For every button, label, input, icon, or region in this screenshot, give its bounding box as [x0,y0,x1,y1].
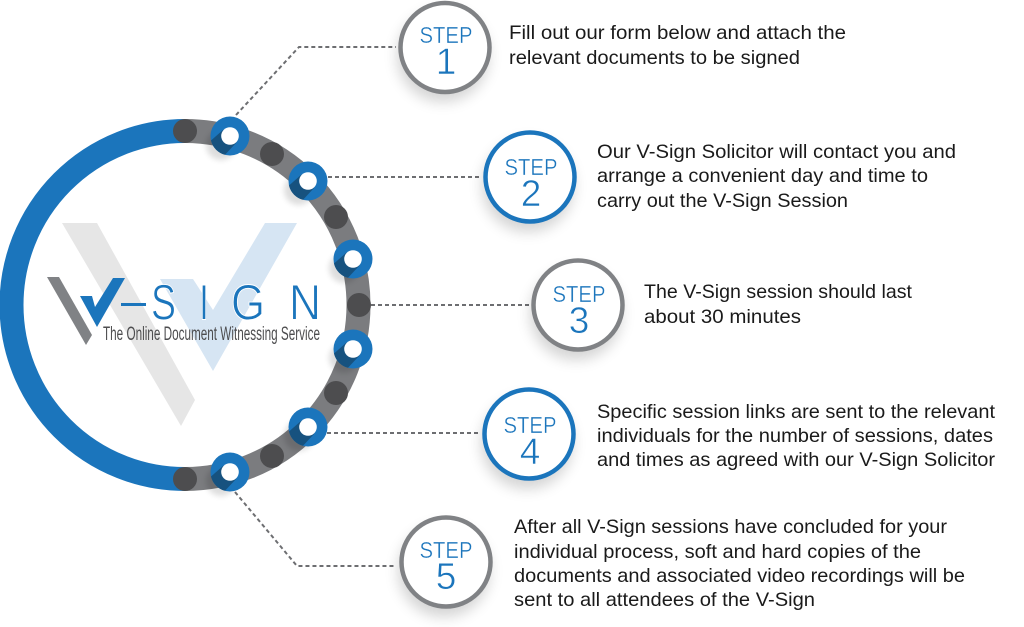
step 4 badge [481,390,574,489]
step 2 badge: STEP [504,154,558,180]
step 2 badge [482,132,574,232]
logo [47,274,321,345]
ring: dark dots [173,119,371,491]
logo: wordmark [151,274,321,330]
step 4 text: and times as agreed with our V-Sign Solicitor [597,449,996,471]
step 4 text: individuals for the number of sessions, dates [597,425,993,447]
step 5 text: After all V-Sign sessions have concluded for your [514,516,948,538]
step 3 badge: 3 [569,300,589,341]
step 2 text: carry out the V-Sign Session [597,190,848,212]
logo: dash [121,303,146,306]
step 2 text: Our V-Sign Solicitor will contact you and [597,141,956,163]
ring: blue arc [11,131,185,479]
step 5 badge: STEP [420,537,472,563]
logo: wordmark: N [289,274,321,330]
step 1 text: Fill out our form below and attach the [509,22,846,44]
step 2 text [597,141,956,212]
step 3 text: The V-Sign session should last [644,281,913,303]
step 5 text: documents and associated video recordings will be [514,565,965,587]
step 4 badge: STEP [504,412,556,438]
step 1 badge [397,3,490,102]
logo: wordmark: I [199,274,209,330]
logo: wordmark: S [151,274,176,330]
step 1 text: relevant documents to be signed [509,47,800,69]
step 4 badge: 4 [520,431,540,472]
step 1 badge: 1 [436,41,456,82]
logo watermark [62,223,297,426]
step 2 text: arrange a convenient day and time to [597,165,928,187]
step 1 badge: STEP [420,22,472,48]
step 5 text: sent to all attendees of the V-Sign [514,589,815,611]
logo: tagline: The Online Document Witnessing Service [103,324,320,345]
step 5 badge [398,518,490,617]
step 5 text [514,516,965,611]
logo: wordmark: G [231,274,265,330]
connector lines [235,47,529,566]
step 5 text: individual process, soft and hard copies of the [514,541,921,563]
step 3 badge: STEP [552,281,606,307]
ring: blue nodes [206,116,372,496]
ring: grey arc [185,131,358,479]
step 3 text [644,281,913,328]
step 4 text [597,401,996,471]
step 2 badge: 2 [521,173,541,214]
step 1 text [509,22,846,69]
step 4 text: Specific session links are sent to the relevant [597,401,996,423]
logo: V mark [47,277,125,345]
step 3 badge [530,260,622,360]
step 5 badge: 5 [436,556,456,597]
step 3 text: about 30 minutes [644,306,801,328]
